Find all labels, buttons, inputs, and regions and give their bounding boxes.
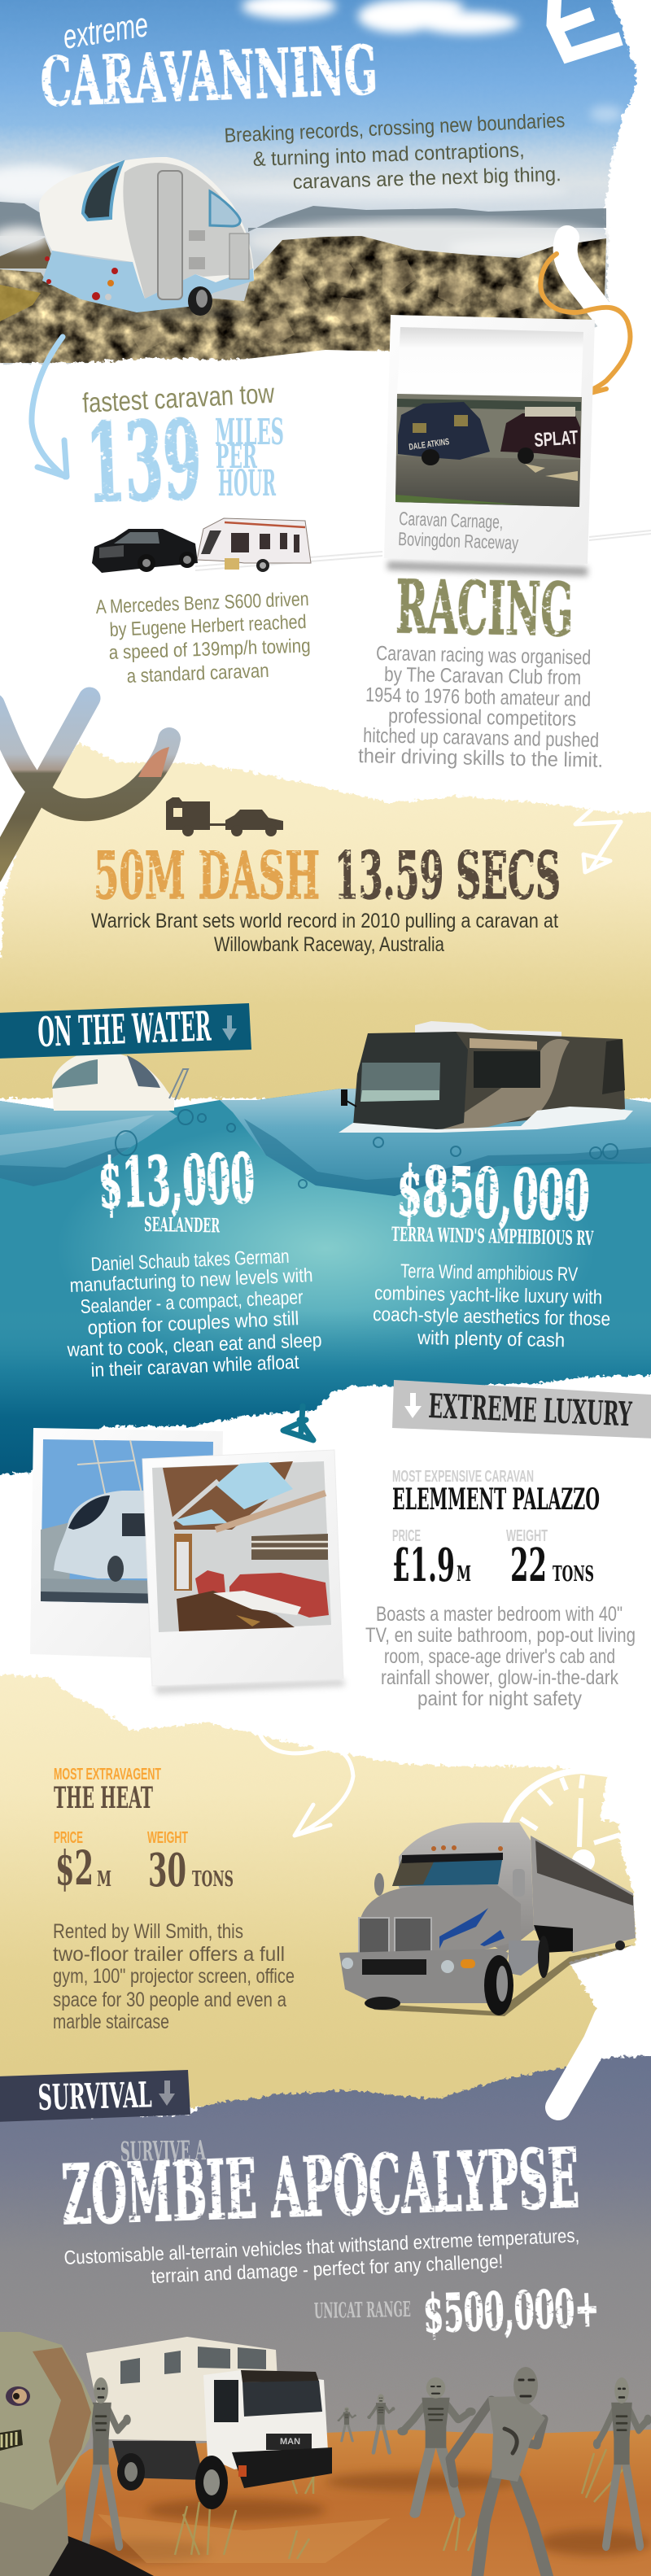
neck xyxy=(0,2482,68,2576)
mercedes text: a standard caravan xyxy=(126,660,269,688)
miles per hour: PER xyxy=(216,438,257,476)
white shell xyxy=(39,157,254,299)
heat stats xyxy=(54,1766,234,1897)
heat text: Rented by Will Smith, this xyxy=(53,1920,243,1943)
polaroid: palazzo interior xyxy=(142,1450,345,1694)
palazzo text xyxy=(365,1603,636,1710)
large zombie xyxy=(450,2367,548,2576)
mercedes text xyxy=(95,588,311,688)
small hatch xyxy=(229,234,249,279)
caravan xyxy=(197,518,311,563)
name: SEALANDER xyxy=(144,1212,221,1238)
wave surface right xyxy=(220,1089,651,1196)
palazzo text: paint for night safety xyxy=(417,1687,582,1710)
50m dash: 50M DASH xyxy=(94,837,320,914)
name: THE HEAT xyxy=(54,1781,153,1815)
amber lights xyxy=(431,1845,503,1851)
cloud layer xyxy=(0,220,614,262)
grey side xyxy=(123,163,252,299)
trailer xyxy=(531,1836,636,1953)
car xyxy=(92,529,198,573)
caption xyxy=(398,508,519,553)
heat text: two-floor trailer offers a full xyxy=(53,1943,285,1966)
sky xyxy=(0,0,636,374)
sealander text xyxy=(66,1246,322,1382)
kicker: SURVIVE A xyxy=(120,2134,206,2168)
icon: the heat truck xyxy=(339,1823,636,2016)
icon: down arrow xyxy=(222,1015,237,1041)
icon: unicat expedition truck xyxy=(86,2337,332,2509)
photo xyxy=(41,1439,213,1605)
icon: sealander boat xyxy=(52,1050,188,1111)
awning xyxy=(470,1038,537,1050)
hero intro text: Breaking records, crossing new boundaries xyxy=(224,109,566,147)
eyebrow: MOST EXTRAVAGENT xyxy=(54,1766,161,1784)
unicat price xyxy=(314,2277,600,2345)
dash text: Warrick Brant sets world record in 2010 pulling a caravan at xyxy=(91,910,558,932)
icon: unicat expedition truck: MAN xyxy=(280,2437,300,2447)
panel: extreme luxury white section xyxy=(0,1375,651,1733)
racing text: Caravan racing was organised xyxy=(376,642,591,670)
price unit: M xyxy=(97,1867,111,1892)
eye xyxy=(6,2386,30,2406)
clouds xyxy=(0,0,623,201)
price unit: M xyxy=(457,1562,471,1587)
zombie text xyxy=(63,2225,580,2288)
polaroid: caravan carnage xyxy=(384,315,595,576)
rocks in letter xyxy=(138,747,169,777)
dune shadows xyxy=(65,2472,651,2562)
cab top xyxy=(399,1823,534,1953)
white squiggle stroke xyxy=(566,238,614,325)
side window xyxy=(210,191,240,226)
rust shading xyxy=(33,2347,91,2486)
caption: Bovingdon Raceway xyxy=(398,528,519,553)
road lines xyxy=(195,530,651,570)
dash text xyxy=(91,910,558,956)
ground shadow xyxy=(366,1945,635,2016)
zombie figures foreground xyxy=(72,2377,651,2546)
banner title: SURVIVAL xyxy=(37,2075,152,2119)
fastest caravan tow stat xyxy=(81,378,284,527)
vents xyxy=(189,230,205,241)
shadow xyxy=(98,307,252,320)
mirror xyxy=(342,1090,356,1107)
heat text: marble staircase xyxy=(53,2011,169,2033)
icon: teardrop caravan xyxy=(39,157,254,320)
zombie figures background xyxy=(338,2394,395,2453)
roof units xyxy=(415,1021,561,1038)
dash stat xyxy=(94,837,561,914)
body xyxy=(0,2522,154,2576)
zombie text: terrain and damage - perfect for any challenge! xyxy=(151,2251,504,2288)
chassis xyxy=(112,2441,203,2480)
mercedes text: by Eugene Herbert reached xyxy=(109,611,307,641)
weight: 30 xyxy=(148,1844,186,1897)
caption: Caravan Carnage, xyxy=(399,508,504,532)
photo xyxy=(152,1461,331,1632)
zombie heading xyxy=(60,2130,580,2243)
bubbles xyxy=(116,1110,618,1188)
weight unit: TONS xyxy=(553,1562,594,1587)
racing text: hitched up caravans and pushed xyxy=(363,724,599,752)
panel: sand heat section xyxy=(0,1674,636,2107)
arrow: blue xyxy=(32,337,67,477)
sealander text: want to cook, clean eat and sleep xyxy=(66,1329,322,1361)
door xyxy=(158,171,182,299)
side xyxy=(436,1032,625,1131)
title: caravanning: CARAVANNING xyxy=(39,32,378,122)
palazzo stats xyxy=(392,1468,600,1592)
extreme luxury banner xyxy=(392,1380,651,1439)
panel: hero landscape xyxy=(0,0,636,374)
miles per hour: MILES xyxy=(215,412,284,453)
wheels xyxy=(195,2456,228,2509)
icon: down arrow xyxy=(159,2080,175,2106)
blue lower xyxy=(42,251,254,312)
wheels xyxy=(365,1997,400,2010)
hero intro text: & turning into mad contraptions, xyxy=(252,138,525,171)
cab xyxy=(203,2370,328,2469)
title: extreme: extreme xyxy=(60,5,151,56)
torn white base under hero xyxy=(0,342,618,382)
windshield xyxy=(392,1855,503,1886)
bumper xyxy=(232,2447,332,2488)
cab steps xyxy=(509,1941,541,1976)
miles per hour xyxy=(215,412,284,504)
panel: survival grey section xyxy=(0,2055,651,2576)
water body xyxy=(0,1089,651,1489)
photo xyxy=(395,394,582,507)
meadow patch xyxy=(0,285,41,321)
inner blank area xyxy=(397,327,583,399)
head xyxy=(0,2332,94,2510)
heat text xyxy=(53,1920,295,2033)
racing text: 1954 to 1976 both amateur and xyxy=(365,683,591,711)
dash text: Willowbank Raceway, Australia xyxy=(214,933,444,956)
miles per hour: HOUR xyxy=(218,463,276,504)
racing text xyxy=(358,642,603,772)
sealander text: Sealander - a compact, cheaper xyxy=(80,1286,304,1318)
price: $2 xyxy=(55,1840,94,1896)
rock facets xyxy=(130,254,531,353)
grille xyxy=(359,1918,389,1954)
price: £1.9 xyxy=(392,1539,455,1592)
weight label: WEIGHT xyxy=(147,1829,188,1847)
splat car xyxy=(500,413,580,458)
icon: landscape-filled letter X xyxy=(0,698,169,875)
blue flames xyxy=(439,1908,505,1983)
terra wind text xyxy=(373,1260,610,1351)
hero intro text: caravans are the next big thing. xyxy=(292,163,561,194)
terra wind stat xyxy=(391,1151,594,1250)
weight unit: TONS xyxy=(192,1867,234,1892)
weight: 22 xyxy=(510,1539,547,1592)
mercedes text: A Mercedes Benz S600 driven xyxy=(95,588,309,618)
card xyxy=(384,315,595,564)
desert ground xyxy=(57,2430,651,2576)
caravan wreck xyxy=(398,402,490,460)
arrow: white curve xyxy=(260,1733,353,1836)
drop shadow xyxy=(387,561,588,576)
photo: DALE ATKINS xyxy=(409,437,450,452)
icon: torn letter E xyxy=(553,0,614,55)
bumper xyxy=(339,1949,509,2003)
mercedes text: a speed of 139mp/h towing xyxy=(108,635,311,664)
icon: car towing caravan xyxy=(92,518,311,573)
mirrors xyxy=(374,1873,384,1896)
icon: down arrow xyxy=(404,1393,422,1418)
icon: terra wind bus xyxy=(339,1021,633,1133)
terra wind text: with plenty of cash xyxy=(417,1327,565,1351)
wheel xyxy=(188,286,212,316)
arrow: orange xyxy=(540,254,631,397)
windows xyxy=(474,1051,540,1088)
label: fastest caravan tow xyxy=(81,378,275,419)
sealander text: option for couples who still xyxy=(87,1308,299,1339)
on the water banner: ON THE WATER xyxy=(37,1002,212,1056)
survival banner xyxy=(0,2070,190,2122)
distant mountains xyxy=(0,202,606,236)
arrow: white squiggle xyxy=(575,810,621,872)
price label: PRICE xyxy=(54,1829,83,1847)
sealander text: Daniel Schaub takes German xyxy=(90,1246,290,1276)
panel: water xyxy=(0,1089,651,1489)
grass tufts xyxy=(175,2449,627,2559)
wave dark shading xyxy=(0,1119,651,1196)
tan swoosh xyxy=(439,1039,570,1131)
windshield xyxy=(360,1063,440,1102)
tail lights xyxy=(45,256,118,300)
arrow: teal xyxy=(283,1406,313,1440)
shadow xyxy=(155,1679,345,1694)
eyebrow: MOST EXPENSIVE CARAVAN xyxy=(392,1468,534,1486)
label: UNICAT RANGE xyxy=(314,2298,411,2324)
title xyxy=(39,5,378,122)
photo: SPLAT xyxy=(534,426,579,452)
on the water banner xyxy=(0,1002,251,1059)
heat text: gym, 100" projector screen, office xyxy=(53,1965,295,1988)
heat text: space for 30 people and even a xyxy=(53,1989,286,2011)
sealander stat xyxy=(97,1138,256,1238)
terra wind text: Terra Wind amphibious RV xyxy=(400,1260,578,1286)
wave surface left xyxy=(0,1101,177,1186)
grille xyxy=(266,2434,312,2450)
right torn white strip xyxy=(609,203,651,358)
sealander text: manufacturing to new levels with xyxy=(69,1264,313,1297)
racing text: by The Caravan Club from xyxy=(384,663,581,689)
racing text: professional competitors xyxy=(388,705,576,731)
panel: sand dash section xyxy=(0,742,651,1098)
terra wind text: coach-style aesthetics for those xyxy=(373,1303,610,1330)
racing text: their driving skills to the limit. xyxy=(358,744,603,772)
mouth xyxy=(0,2430,23,2451)
box xyxy=(86,2337,277,2441)
hero intro text xyxy=(224,109,566,194)
foam xyxy=(339,1107,633,1133)
rock pile xyxy=(0,236,606,363)
rear window xyxy=(83,163,122,220)
giant zombie head xyxy=(0,2332,154,2576)
sealander text: in their caravan while afloat xyxy=(90,1351,299,1382)
icon: caravan and car silhouette xyxy=(166,797,283,836)
terra wind text: combines yacht-like luxury with xyxy=(374,1282,602,1308)
polaroid: palazzo exterior xyxy=(30,1428,223,1660)
icon: speedometer dial xyxy=(505,1770,620,1872)
price: $13,000 xyxy=(97,1138,256,1224)
price label: PRICE xyxy=(392,1527,421,1545)
hood xyxy=(360,1884,521,1954)
dark roof band xyxy=(602,1039,625,1094)
white sweeping stroke xyxy=(558,2018,606,2107)
weight label: WEIGHT xyxy=(506,1527,548,1545)
front xyxy=(353,1032,468,1131)
number 139: 139 xyxy=(85,397,203,527)
